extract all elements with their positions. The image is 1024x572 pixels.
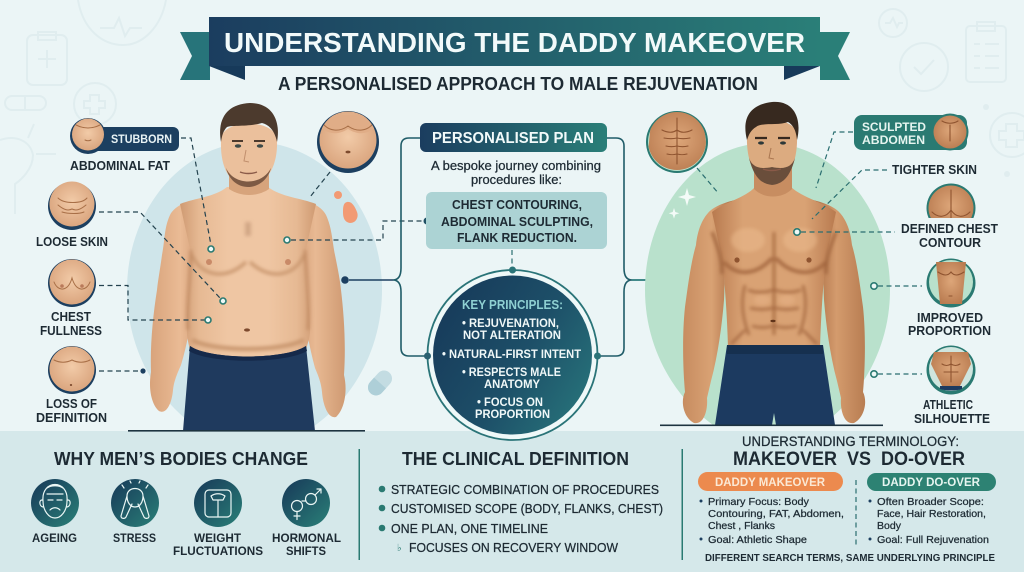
callout: improved proportion: PROPORTION <box>908 323 991 338</box>
bullet list: CUSTOMISED SCOPE (BODY, FLANKS, CHEST) <box>391 501 663 516</box>
key principles text <box>442 298 581 421</box>
key principles text: • FOCUS ON <box>477 397 543 409</box>
ground line right <box>660 424 883 426</box>
daddy makeover column: DADDY MAKEOVER <box>715 477 826 489</box>
daddy do-over column: Face, Hair Restoration, <box>877 508 986 520</box>
key principles text: • RESPECTS MALE <box>462 367 561 379</box>
callout: improved proportion <box>908 258 991 338</box>
sparkles <box>669 188 696 219</box>
callout: chest fullness: FULLNESS <box>40 323 102 338</box>
figure: after man <box>683 102 865 425</box>
ground line left <box>128 430 365 432</box>
icon: stress <box>111 479 159 545</box>
callout: defined chest contour: CONTOUR <box>919 235 982 250</box>
label: tighter skin: TIGHTER SKIN <box>892 162 977 177</box>
orange accent blobs <box>334 191 358 223</box>
neck <box>229 165 269 195</box>
callout: loss of definition <box>36 346 107 425</box>
callout: sculpted abdomen: SCULPTED <box>862 120 926 134</box>
callouts: before <box>36 111 430 425</box>
decorative medical line icons <box>0 0 1024 214</box>
before panel backdrop ellipse <box>127 142 382 431</box>
callout: loose skin: LOOSE SKIN <box>36 234 108 249</box>
procedures box: FLANK REDUCTION. <box>457 231 577 245</box>
capsule accent <box>365 367 395 399</box>
subtitle: A PERSONALISED APPROACH TO MALE REJUVENATION <box>278 74 758 94</box>
daddy do-over column: Goal: Full Rejuvenation <box>877 534 989 546</box>
callout: loss of definition: LOSS OF <box>46 396 97 411</box>
torso <box>180 187 316 364</box>
key principles text: • REJUVENATION, <box>462 318 559 330</box>
key principles text: ANATOMY <box>484 379 540 391</box>
arms <box>150 199 205 412</box>
heading pill: PERSONALISED PLAN <box>432 130 594 147</box>
callout: athletic silhouette: SILHOUETTE <box>914 411 990 426</box>
head <box>747 120 797 185</box>
callout: sculpted abdomen <box>854 114 968 150</box>
icon: ageing: AGEING <box>32 533 77 545</box>
title banner <box>180 17 850 80</box>
icon: stress: STRESS <box>113 533 156 545</box>
head <box>221 124 277 186</box>
daddy do-over column: Often Broader Scope: <box>877 496 984 508</box>
callout: defined chest contour <box>901 184 998 250</box>
callout: stubborn abdominal fat: STUBBORN <box>111 134 172 146</box>
leader lines: after <box>697 132 922 377</box>
callout: defined chest contour: DEFINED CHEST <box>901 221 998 236</box>
key principles circle <box>424 266 601 440</box>
body shading <box>187 222 309 349</box>
leader lines: before <box>99 138 430 374</box>
figure: before man <box>150 103 346 431</box>
daddy do-over column: Body <box>877 520 902 532</box>
key principles text: NOT ALTERATION <box>463 330 561 342</box>
callout: sculpted abdomen: ABDOMEN <box>862 133 925 147</box>
intro text <box>431 159 601 187</box>
section heading: WHY MEN’S BODIES CHANGE <box>54 449 308 469</box>
icon: hormonal shifts <box>272 479 341 558</box>
procedures box: CHEST CONTOURING, <box>452 198 582 212</box>
bullet list: ♭ <box>397 543 402 554</box>
neck <box>754 165 792 196</box>
icon: weight scale: WEIGHT <box>194 533 241 545</box>
daddy makeover column: Primary Focus: Body <box>708 496 810 508</box>
muscle definition <box>712 232 836 344</box>
after panel backdrop ellipse <box>645 143 890 425</box>
panel: personalised plan <box>420 123 607 268</box>
bottom panel background <box>0 431 1024 572</box>
daddy makeover column: Chest , Flanks <box>708 520 775 532</box>
procedures box <box>426 192 607 249</box>
daddy makeover column <box>698 472 844 546</box>
panel: the clinical definition <box>379 449 663 555</box>
key principles text: PROPORTION <box>475 409 550 421</box>
daddy do-over column: DADDY DO-OVER <box>882 477 981 489</box>
bullet list <box>379 482 663 555</box>
icon: weight scale: FLUCTUATIONS <box>173 546 263 558</box>
plan connector lines and brace <box>341 138 680 356</box>
callout: abs thumbnail <box>646 111 710 173</box>
procedures box: ABDOMINAL SCULPTING, <box>441 215 593 229</box>
icon: ageing <box>31 479 79 545</box>
footer note: DIFFERENT SEARCH TERMS, SAME UNDERLYING PRINCIPLE <box>705 553 995 564</box>
daddy makeover column: Goal: Athletic Shape <box>708 534 807 546</box>
callout: chest fullness: CHEST <box>51 309 91 324</box>
bullet list: FOCUSES ON RECOVERY WINDOW <box>409 540 619 555</box>
label: abdominal fat: ABDOMINAL FAT <box>70 158 170 173</box>
callouts: after <box>646 111 998 426</box>
title text: UNDERSTANDING THE DADDY MAKEOVER <box>224 27 805 58</box>
daddy makeover column: Contouring, FAT, Abdomen, <box>708 508 844 520</box>
daddy do-over column <box>867 473 996 546</box>
shorts <box>715 345 835 425</box>
intro text: procedures like: <box>471 173 562 187</box>
icon: hormonal shifts: HORMONAL <box>272 533 341 545</box>
callout: athletic silhouette <box>914 346 990 426</box>
callout: athletic silhouette: ATHLETIC <box>923 397 973 412</box>
panel: understanding terminology: MAKEOVER VS DO-OVER <box>733 449 965 470</box>
shorts <box>183 346 315 431</box>
panel: understanding terminology <box>698 434 996 564</box>
icon: hormonal shifts: SHIFTS <box>286 546 326 558</box>
panel: why men's bodies change <box>31 449 341 558</box>
key principles text: KEY PRINCIPLES: <box>462 298 563 312</box>
callout: stubborn abdominal fat <box>70 118 179 154</box>
torso <box>712 187 836 347</box>
intro text: A bespoke journey combining <box>431 159 601 173</box>
icon: weight scale <box>173 479 263 558</box>
callout: chest fullness <box>40 259 102 338</box>
callout: belly thumbnail <box>317 111 379 173</box>
callout: loss of definition: DEFINITION <box>36 410 107 425</box>
callout: improved proportion: IMPROVED <box>917 310 983 325</box>
arms <box>683 200 735 423</box>
bullet list: ONE PLAN, ONE TIMELINE <box>391 521 548 536</box>
section headings: UNDERSTANDING TERMINOLOGY: <box>742 434 959 449</box>
heading pill <box>420 123 607 152</box>
section heading: THE CLINICAL DEFINITION <box>402 449 629 469</box>
bullet list: STRATEGIC COMBINATION OF PROCEDURES <box>391 482 659 497</box>
callout: loose skin <box>36 182 108 249</box>
key principles text: • NATURAL-FIRST INTENT <box>442 349 581 361</box>
